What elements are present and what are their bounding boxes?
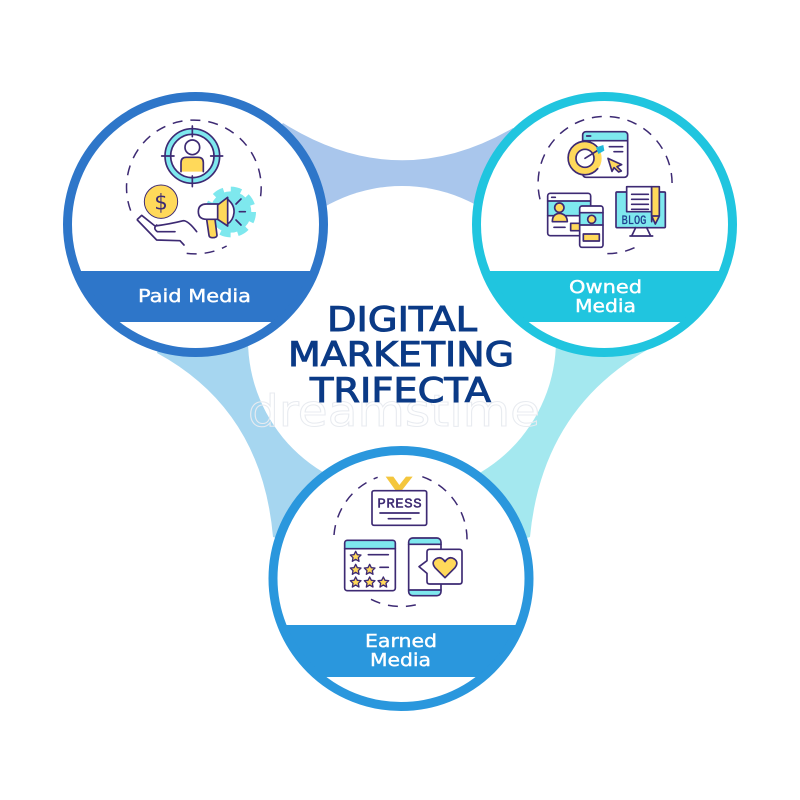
icon group: earned media: PRESS [377, 497, 422, 513]
icon group: paid media [127, 120, 261, 254]
watermark: dreamstime [248, 386, 540, 437]
panel: earned media [265, 450, 535, 706]
title [288, 300, 514, 411]
label band: earned media [286, 625, 516, 677]
label band: paid media [81, 271, 310, 322]
connector: paid to owned [195, 123, 604, 300]
connector: owned to earned [400, 224, 647, 578]
title: TRIFECTA [309, 371, 491, 411]
label: earned media [365, 631, 437, 671]
icon group: owned media [538, 116, 672, 254]
label band: owned media [490, 271, 719, 322]
label: earned media: Media [370, 650, 431, 671]
panel: paid media [60, 96, 330, 352]
icon group: paid media: $ [154, 190, 168, 215]
panel: owned media [470, 96, 740, 352]
title: DIGITAL [327, 300, 477, 340]
connector: paid to earned [157, 224, 401, 578]
label: owned media: Media [575, 296, 636, 317]
central white disc [248, 186, 556, 494]
label: owned media: Owned [569, 277, 642, 298]
label: owned media [569, 277, 642, 317]
icon group: earned media [334, 477, 467, 607]
icon group: owned media: BLOG [622, 213, 646, 228]
label: paid media: Paid Media [138, 286, 251, 307]
title: MARKETING [288, 335, 514, 375]
label: earned media: Earned [365, 631, 437, 652]
